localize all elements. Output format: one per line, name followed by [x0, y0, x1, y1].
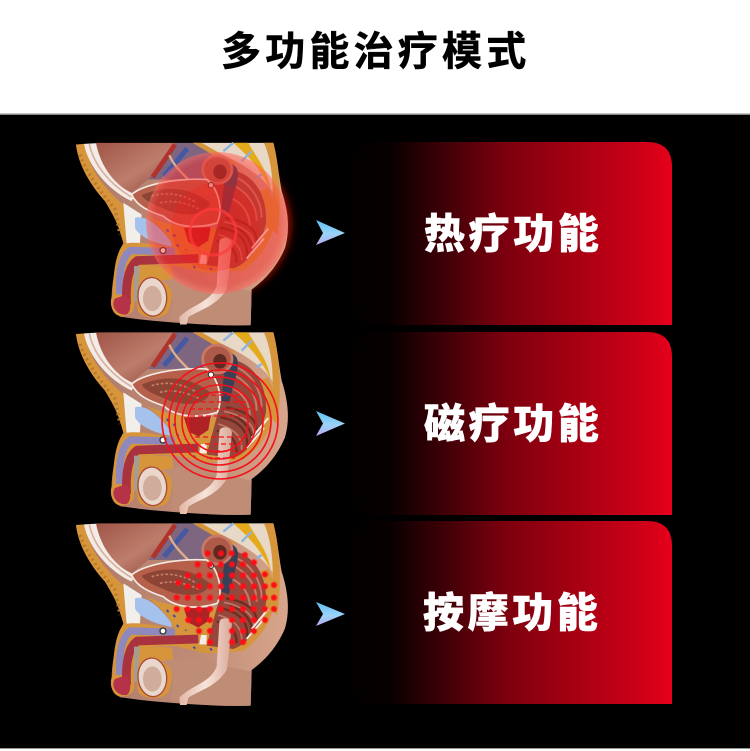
- arrow: [316, 602, 345, 626]
- panel: magnetic therapy: [76, 332, 672, 515]
- concentric rings: [162, 363, 278, 479]
- panel: heat therapy: [76, 142, 672, 325]
- title: 多功能治疗模式: [221, 30, 530, 74]
- anatomy illustration with magnetic rings: [76, 332, 288, 515]
- arrow: [316, 220, 345, 245]
- function card: [352, 332, 672, 515]
- arrow: [316, 411, 345, 436]
- panel: massage: [76, 521, 672, 706]
- card label: 磁疗功能: [424, 401, 602, 447]
- function card: [352, 521, 672, 704]
- anatomy illustration with heat overlay: [76, 143, 289, 325]
- massage dot grid: [174, 550, 277, 645]
- card label: 按摩功能: [423, 590, 601, 636]
- card label: 热疗功能: [424, 211, 602, 257]
- function card: [352, 142, 672, 325]
- anatomy illustration with massage dots: [76, 523, 288, 706]
